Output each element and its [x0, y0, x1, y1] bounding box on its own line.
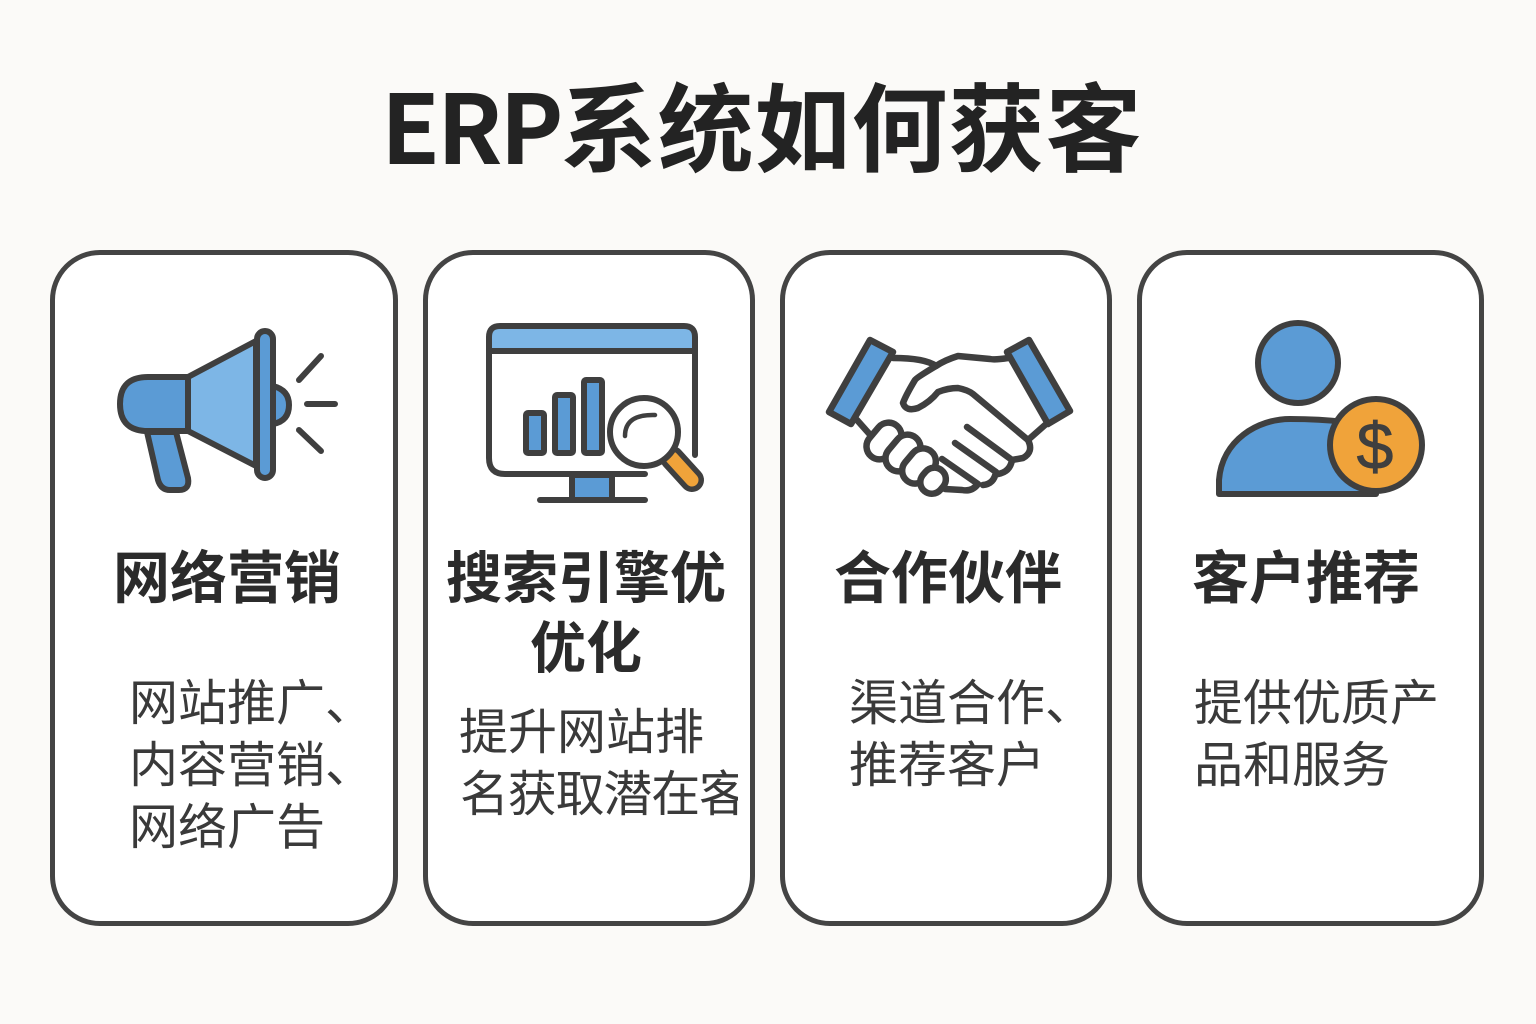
panel: 网络营销	[50, 250, 398, 926]
text: 合作伙伴 description: 渠道合作、	[849, 677, 1094, 731]
text: 网络营销 description: 网站推广、	[129, 677, 374, 731]
text: 客户推荐 description	[1194, 677, 1439, 793]
heading: 搜索引擎优化: 优化	[530, 617, 642, 680]
heading: 搜索引擎优化: 搜索引擎优	[446, 547, 726, 610]
heading: 合作伙伴: 合作伙伴	[834, 547, 1062, 611]
text: 网络营销 description: 内容营销、	[129, 739, 374, 793]
text: 搜索引擎优化 description	[459, 706, 738, 822]
icon: customer with dollar coin: $	[1357, 409, 1393, 483]
text: 网络营销 description: 网络广告	[129, 801, 325, 855]
text: 搜索引擎优化 description: 提升网站排	[459, 706, 704, 760]
title: ERP系统如何获客	[381, 53, 1143, 192]
text: 网络营销 description	[129, 677, 374, 855]
heading: 客户推荐: 客户推荐	[1192, 547, 1420, 611]
heading: 网络营销: 网络营销	[113, 547, 341, 611]
panel: 客户推荐	[1137, 250, 1484, 926]
text: 客户推荐 description: 品和服务	[1194, 739, 1390, 793]
heading: 搜索引擎优化	[446, 547, 726, 680]
text: 合作伙伴 description: 推荐客户	[849, 739, 1045, 793]
text: 客户推荐 description: 提供优质产	[1194, 677, 1439, 731]
panel: 合作伙伴	[780, 250, 1112, 926]
panel: 搜索引擎优化	[423, 250, 755, 926]
text: 合作伙伴 description	[849, 677, 1094, 793]
